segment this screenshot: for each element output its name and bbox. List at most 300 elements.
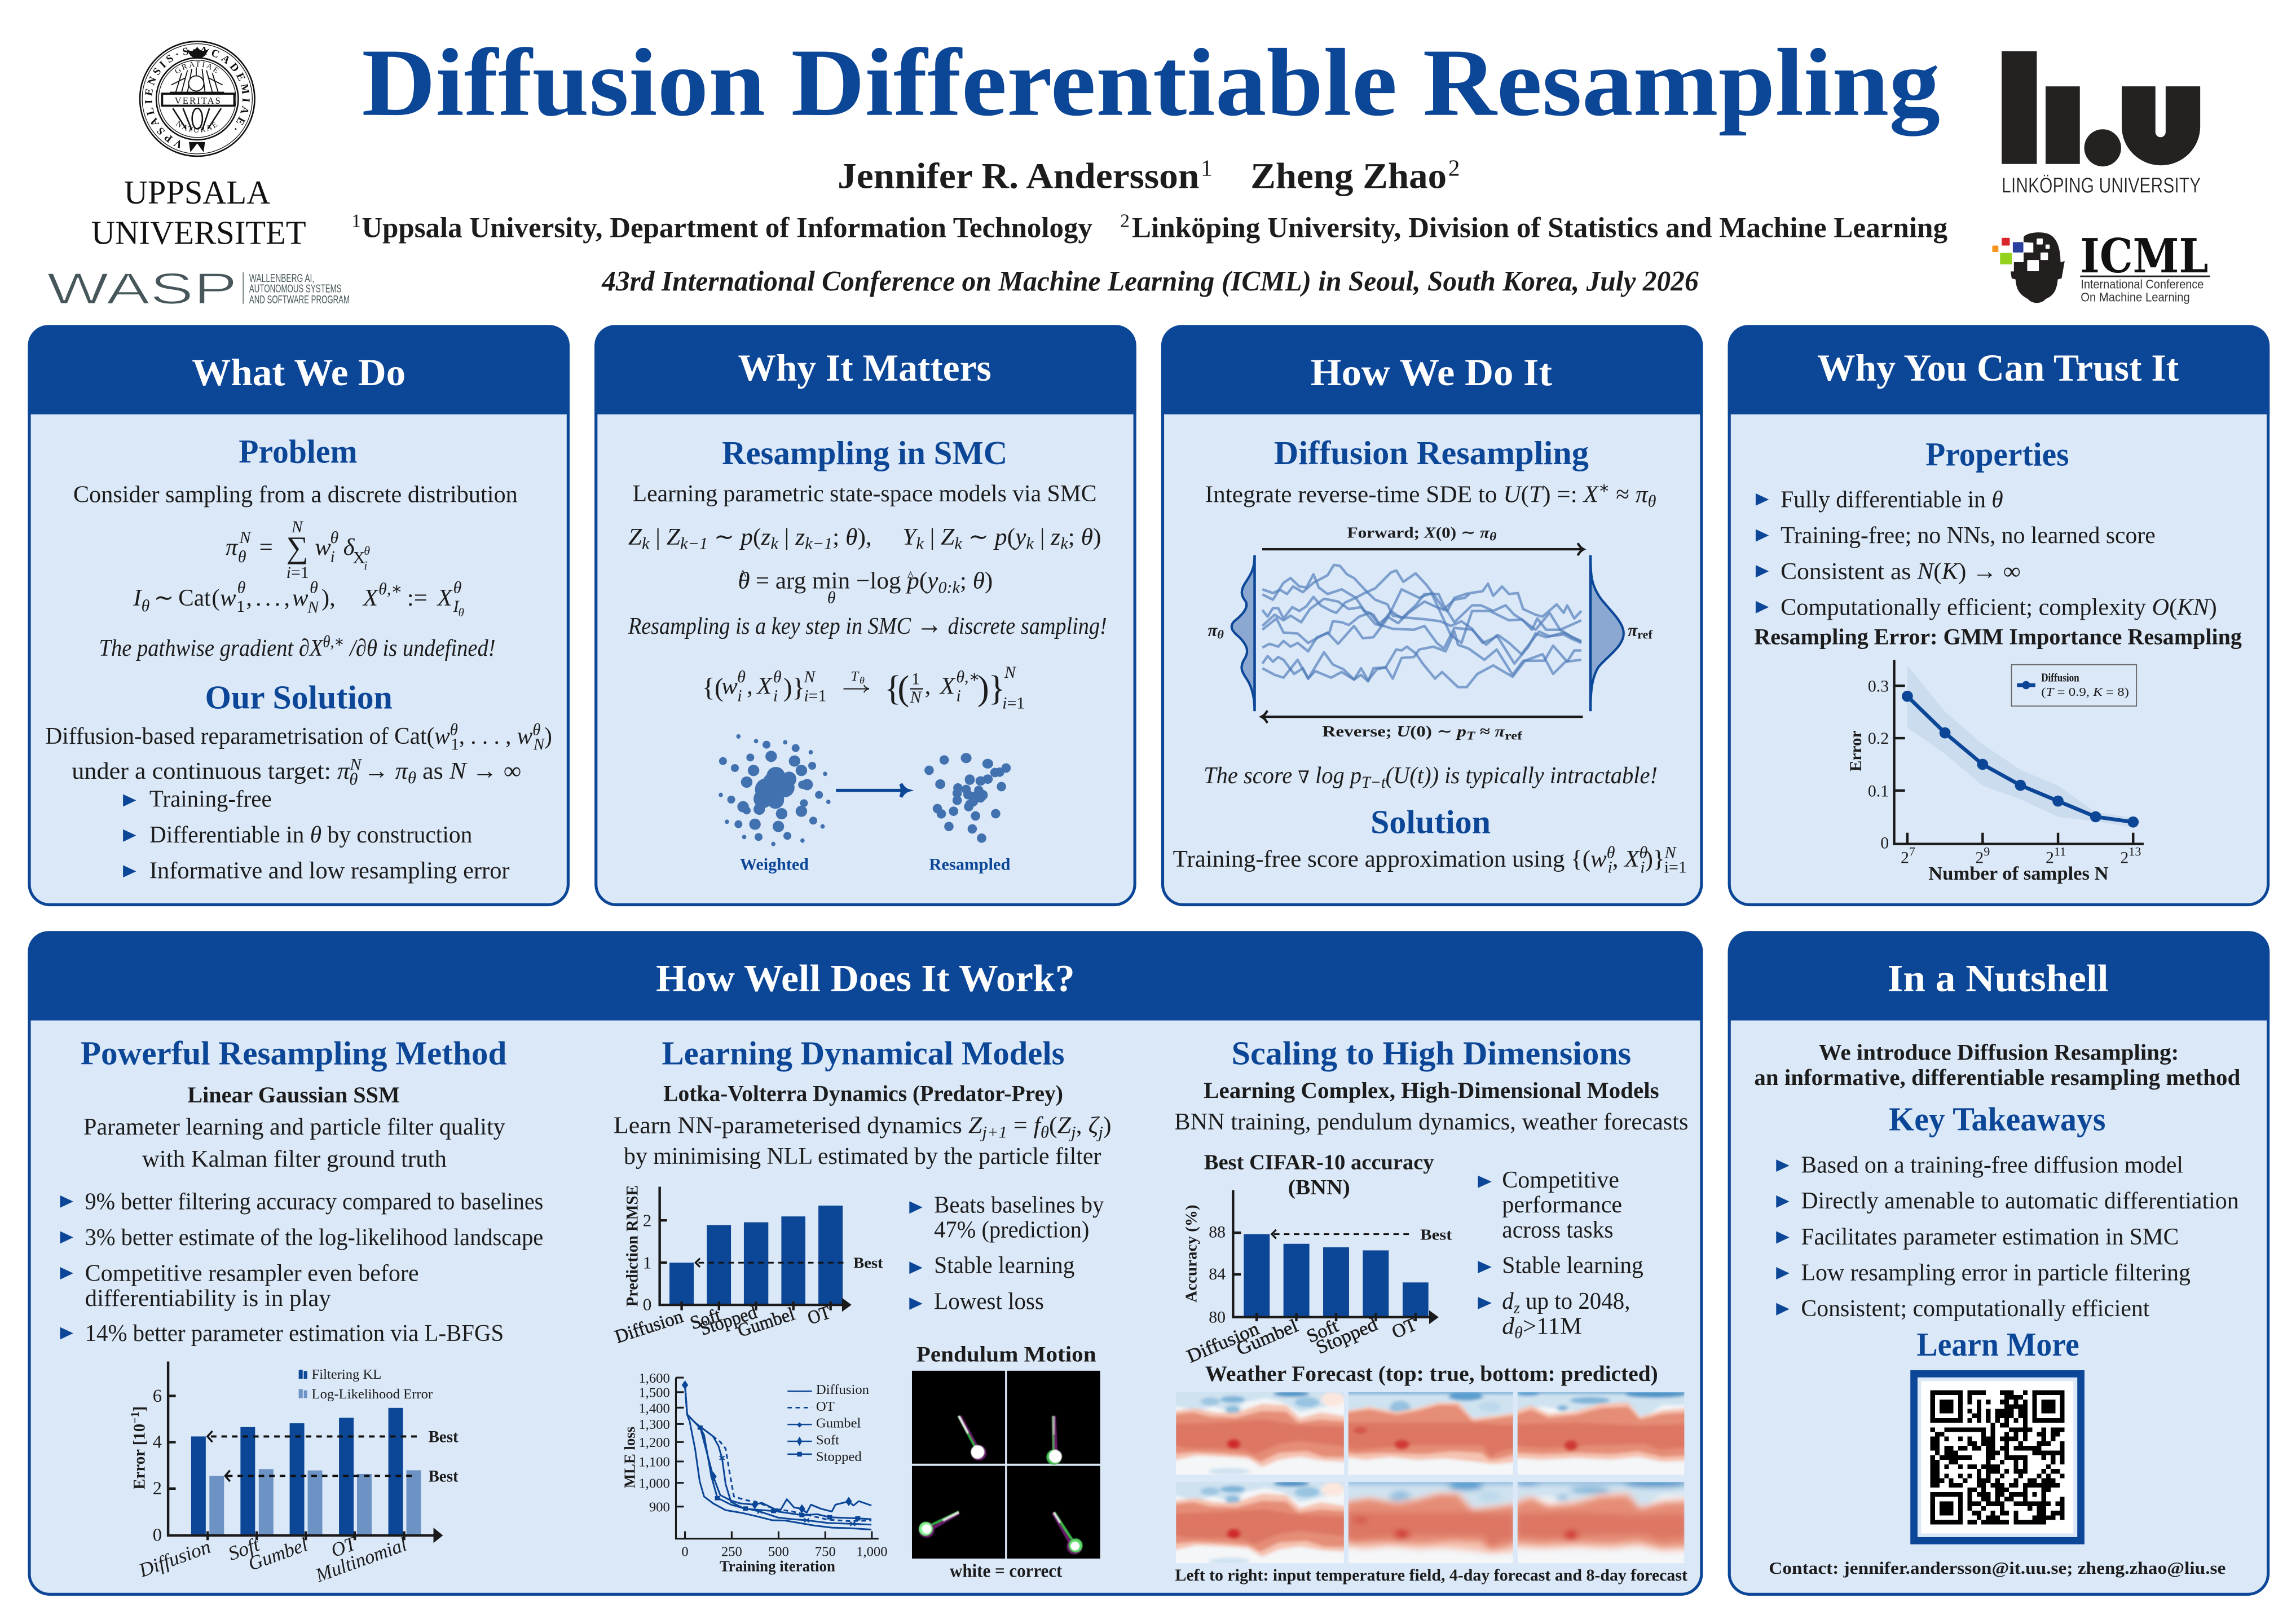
equation: resampling transport: {	[702, 673, 715, 703]
diagram: forward and reverse diffusion	[1208, 524, 1652, 742]
text: method description	[83, 1114, 505, 1172]
y tick labels: 6	[153, 1386, 162, 1406]
text: dynamics description: ζ	[1088, 1112, 1100, 1138]
affiliations: 1	[351, 210, 361, 231]
legend: Gumbel	[816, 1415, 861, 1431]
caption: weather forecast: Left to right: input temperature field, 4-day forecast and 8-day forecast	[1175, 1566, 1687, 1585]
panel body	[29, 933, 1702, 1594]
bullets: scaling results: performance	[1502, 1191, 1622, 1218]
equation: MLE objective: θ	[738, 568, 750, 594]
heatmap: predicted 8-day	[1517, 1482, 1684, 1563]
bullets: dynamics results: 47% (prediction)	[934, 1217, 1089, 1243]
equation: categorical index: X	[437, 585, 453, 611]
arrow: axis head	[434, 1528, 443, 1543]
equation: state-space model: k	[954, 535, 963, 553]
text: dynamics description: j	[1069, 1123, 1076, 1141]
y tick labels	[153, 1386, 162, 1546]
x tick labels: Stopped	[697, 1301, 760, 1340]
text: resampling is key: Resampling is a key step in SMC → discrete sampling!	[628, 608, 1107, 641]
equation: resampling transport: }	[792, 673, 805, 703]
text: solution description: →	[358, 758, 395, 784]
label: best: Best	[428, 1467, 459, 1485]
subheading: Scaling to High Dimensions: Scaling to High Dimensions	[1231, 1034, 1631, 1071]
equation: MLE objective	[738, 567, 993, 607]
subheading: Diffusion Resampling: Diffusion Resampling	[1274, 434, 1589, 471]
text: solution description: as	[416, 758, 449, 784]
text: dynamics description: θ	[1041, 1123, 1049, 1141]
bullets: scaling results: z	[1513, 1299, 1520, 1317]
x tick labels: Gumbel	[245, 1533, 311, 1575]
x tick labels: Stopped	[1313, 1314, 1381, 1358]
equation: empirical distribution: θ	[330, 528, 338, 547]
bullets: solution properties: Training-free	[149, 786, 272, 813]
equation: categorical index: I	[133, 585, 142, 611]
authors: Zheng Zhao	[1250, 156, 1447, 197]
text: training-free score: i	[1640, 858, 1645, 876]
equation: resampling transport: i=1	[804, 687, 826, 705]
text: solution description: θ	[450, 720, 458, 739]
label: pi ref: π	[1628, 620, 1638, 640]
label: pi ref: ref	[1637, 628, 1652, 642]
legend: Stopped	[816, 1449, 862, 1464]
arrowhead: filtering best	[208, 1431, 213, 1442]
text: training-free score: ,	[1612, 846, 1624, 872]
x tick labels: 1,000	[856, 1544, 888, 1560]
density: left target	[1232, 555, 1255, 711]
legend: Filtering KL	[312, 1367, 381, 1382]
text: dynamics description: Z	[1057, 1112, 1072, 1138]
chart: resampling error line	[1847, 660, 2144, 884]
axes	[660, 1187, 848, 1310]
heading: What We Do: What We Do	[192, 351, 406, 394]
x tick labels	[1901, 844, 2141, 867]
text: Linköping University: LINKÖPING UNIVERSITY	[2002, 173, 2201, 197]
heatmap: true input	[1176, 1392, 1344, 1475]
equation: state-space model: k−1	[680, 535, 708, 553]
bullets: dynamics results	[909, 1192, 1104, 1315]
x tick labels: OT	[328, 1532, 360, 1561]
x tick labels: OT	[1389, 1314, 1420, 1343]
text: solution description: π	[395, 758, 408, 784]
text: WASP program name: AUTONOMOUS SYSTEMS	[249, 283, 341, 295]
bullets: dynamics results: Lowest loss	[934, 1288, 1044, 1315]
equation: categorical index: Cat	[178, 585, 210, 611]
equation: resampling transport: X	[756, 673, 773, 700]
text: dynamics description: Learn NN-parameterised dynamics Z	[614, 1112, 982, 1138]
bars: filtering KL	[191, 1408, 403, 1534]
equation: resampling transport: θ	[773, 668, 782, 686]
text: solution description: w	[517, 723, 533, 749]
rule	[2080, 276, 2210, 277]
bullets: key takeaways: Based on a training-free diffusion model	[1801, 1152, 2183, 1179]
text: training-free score: Training-free score approximation using {(w	[1173, 846, 1607, 872]
best line: log-likelihood	[227, 1475, 415, 1476]
curves	[685, 1385, 871, 1530]
text: method description: with Kalman filter ground truth	[142, 1146, 447, 1172]
text: undefined gradient note: /∂θ is undefined!	[345, 635, 496, 661]
equation: state-space model: |	[924, 524, 941, 550]
authors: 2	[1448, 155, 1460, 181]
y tick labels: 2	[643, 1210, 651, 1230]
axes	[1894, 660, 2144, 844]
equation: resampling transport: θ	[860, 674, 865, 686]
subheading: Resampling in SMC: Resampling in SMC	[722, 434, 1007, 471]
equation: state-space model: Z	[667, 524, 681, 550]
equation: MLE objective: θ)	[973, 568, 993, 594]
equation: resampling transport: ,	[925, 673, 931, 700]
label: best: Best	[853, 1254, 883, 1271]
text: solution description: , . . . ,	[459, 723, 517, 749]
x tick labels: Diffusion	[612, 1306, 686, 1348]
axes	[676, 1378, 879, 1539]
bullets: method results: differentiability is in play	[85, 1285, 331, 1312]
x tick labels	[612, 1301, 834, 1348]
QR frame	[1914, 1374, 2081, 1541]
equation: empirical distribution: θ	[238, 548, 246, 566]
legend: Log-Likelihood Error	[312, 1387, 433, 1402]
equation: resampling transport	[702, 663, 1025, 713]
text: scaling tasks: BNN training, pendulum dynamics, weather forecasts	[1174, 1109, 1689, 1135]
icon: Uppsala seal: GRATIAE	[175, 61, 219, 73]
text: reverse-time SDE: ≈	[1610, 482, 1636, 508]
arrowhead: best	[695, 1258, 700, 1267]
QR background	[1921, 1381, 2073, 1533]
text: dynamics description	[614, 1112, 1112, 1170]
bold heading: complex models: Learning Complex, High-Dimensional Models	[1204, 1078, 1659, 1103]
panel: Why You Can Trust It	[1728, 325, 2269, 904]
x axis title: Number of samples N	[1928, 863, 2109, 884]
equation: resampling transport: )	[783, 673, 792, 703]
text: WASP wordmark: WASP	[47, 264, 237, 314]
equation: empirical distribution: w	[315, 534, 331, 561]
y tick labels	[1868, 677, 1889, 853]
text: solution description: N	[533, 735, 545, 753]
y tick labels: 1,500	[638, 1385, 670, 1401]
x tick labels: Soft	[225, 1533, 263, 1565]
icon: Uppsala seal: VERITAS	[175, 95, 222, 106]
equation: categorical index: θ	[453, 578, 461, 597]
bullets: scaling results: >11M	[1523, 1313, 1582, 1339]
equation: state-space model: ∼	[708, 524, 741, 550]
equation: categorical index: w	[292, 585, 309, 611]
equation: empirical distribution: =	[259, 534, 273, 561]
equation: categorical index: ∼	[154, 585, 174, 611]
equation: MLE objective: ^	[739, 567, 746, 583]
text: ICML full name: International Conference	[2081, 277, 2204, 291]
bullets: scaling results: d	[1502, 1288, 1514, 1314]
logo: ICML	[1992, 228, 2210, 304]
logo: WASP	[47, 264, 350, 314]
heading: How Well Does It Work?: How Well Does It Work?	[656, 957, 1075, 1000]
x tick labels: Gumbel	[735, 1304, 797, 1341]
bars: log-likelihood error	[209, 1469, 421, 1534]
x tick labels: 9	[1984, 844, 1990, 858]
equation: state-space model: ;	[832, 524, 845, 550]
chart title: resampling error: Resampling Error: GMM Importance Resampling	[1754, 624, 2242, 649]
x tick labels: 0	[681, 1544, 689, 1560]
text: training-free score: N	[1664, 843, 1677, 862]
x tick labels: 250	[721, 1544, 742, 1560]
y tick labels: 0.1	[1868, 782, 1889, 800]
text: ICML full name	[2081, 277, 2204, 304]
x axis title: Training iteration	[720, 1557, 835, 1574]
text: contact: Contact: jennifer.andersson@it.uu.se; zheng.zhao@liu.se	[1769, 1558, 2226, 1578]
y axis title: Accuracy (%)	[1183, 1204, 1200, 1303]
y tick labels: 1,100	[638, 1455, 670, 1470]
equation: state-space model: k−1	[805, 535, 832, 553]
heading: In a Nutshell: In a Nutshell	[1888, 957, 2109, 1000]
panel body	[1729, 326, 2268, 904]
label: reverse: Reverse; U (0) ∼ p	[1322, 723, 1465, 740]
equation: resampling transport: X	[939, 673, 956, 700]
legend: Soft	[816, 1433, 839, 1448]
legend	[2011, 665, 2136, 706]
bullets: solution properties: Differentiable in θ by construction	[149, 822, 472, 848]
text: ICML full name: On Machine Learning	[2081, 290, 2190, 304]
bold heading: Linear Gaussian SSM: Linear Gaussian SSM	[187, 1082, 400, 1107]
panel: Why It Matters	[594, 325, 1136, 904]
equation: categorical index: θ	[310, 578, 318, 597]
equation: categorical index: X	[362, 585, 379, 611]
frame 2	[1007, 1371, 1100, 1465]
text: dynamics description: =	[1007, 1112, 1034, 1138]
chart: error bars	[129, 1361, 459, 1587]
equation: MLE objective: ;	[960, 568, 973, 594]
chart: MLE loss curves	[621, 1371, 888, 1574]
text: solution description: Diffusion-based reparametrisation of Cat(w	[46, 723, 451, 749]
text: training-free score: )}	[1645, 846, 1665, 872]
text: ICML: ICML	[2080, 228, 2208, 284]
equation: state-space model: θ), Y	[845, 524, 916, 550]
equation: resampling transport: w	[721, 673, 738, 700]
panel body	[1729, 933, 2268, 1594]
y tick labels	[1209, 1223, 1226, 1327]
equation: state-space model: ;	[1068, 524, 1081, 550]
text: solution description: θ	[349, 770, 358, 789]
x tick labels	[135, 1532, 409, 1587]
subheading: Properties: Properties	[1925, 436, 2069, 473]
x tick labels: Diffusion	[1184, 1318, 1262, 1367]
text: training-free score: i=1	[1664, 858, 1687, 876]
equation: MLE objective: 0:k	[938, 578, 960, 597]
equation: empirical distribution: ∑	[287, 530, 308, 564]
title: Diffusion Differentiable Resampling	[362, 29, 1940, 136]
y tick labels: 80	[1209, 1308, 1226, 1327]
equation: resampling transport: (	[715, 673, 724, 703]
heatmap: true 8-day	[1517, 1392, 1684, 1475]
text: solution description: θ	[408, 769, 416, 787]
equation: categorical index: , . . . ,	[246, 585, 290, 611]
text: undefined gradient note: θ,∗	[323, 633, 345, 651]
text: WASP program name: WALLENBERG AI,	[249, 272, 314, 285]
panel: What We Do	[28, 325, 570, 904]
x tick labels	[681, 1544, 888, 1560]
x tick labels: Diffusion	[135, 1535, 214, 1582]
icon: ICML head	[1992, 232, 2065, 303]
divider line	[243, 272, 244, 304]
equation: resampling transport: ,	[747, 673, 753, 700]
images: pendulum frames	[912, 1371, 1100, 1559]
equation: state-space model: z	[1050, 524, 1061, 550]
best line	[1274, 1234, 1412, 1235]
x tick labels: Soft	[688, 1304, 724, 1334]
equation: categorical index: (	[211, 585, 219, 611]
equation: state-space model: |	[778, 524, 795, 550]
equation: resampling transport: N	[1004, 663, 1017, 682]
text: summary statement	[1754, 1040, 2240, 1090]
frame 3	[912, 1466, 1005, 1559]
affiliations	[351, 210, 1947, 244]
text: summary statement: We introduce Diffusion Resampling:	[1819, 1040, 2179, 1065]
bullets: method results: 9% better filtering accuracy compared to baselines	[85, 1188, 543, 1215]
bullets: properties: Training-free; no NNs, no learned score	[1781, 522, 2156, 549]
logo: Uppsala University	[91, 41, 306, 251]
bullets: scaling results	[1478, 1167, 1643, 1342]
heading: Why You Can Trust It: Why You Can Trust It	[1817, 347, 2179, 389]
equation: empirical distribution: N	[239, 528, 252, 547]
bullets: solution properties: Informative and low resampling error	[149, 858, 510, 884]
text: reverse-time SDE: Integrate reverse-time SDE to U(T) =: X	[1205, 482, 1598, 508]
authors: Jennifer R. Andersson	[838, 156, 1199, 197]
equation: categorical index: ),	[321, 585, 336, 611]
equation: resampling transport: i	[773, 687, 778, 705]
bullets: method results: 14% better parameter estimation via L-BFGS	[85, 1320, 504, 1347]
label: reverse: ref	[1505, 730, 1523, 742]
text: intractable score note: The score ∇ log p	[1204, 762, 1362, 789]
equation: categorical index: w	[220, 585, 236, 611]
label: reverse: T	[1466, 730, 1476, 742]
authors	[838, 155, 1460, 197]
y axis title: Error [10	[130, 1422, 148, 1490]
arrowhead: log-likelihood best	[225, 1471, 230, 1481]
caption: white = correct: white = correct	[950, 1561, 1063, 1582]
x tick labels: 2	[2120, 848, 2128, 867]
authors: 1	[1201, 155, 1213, 181]
text: dynamics description: by minimising NLL estimated by the particle filter	[624, 1143, 1101, 1170]
y axis title: MLE loss	[621, 1427, 638, 1488]
text: UPPSALA: UPPSALA	[124, 174, 270, 211]
x tick labels: 2	[2046, 848, 2054, 867]
equation: state-space model: k	[642, 535, 650, 553]
illustration: weighted particles	[719, 734, 831, 846]
text: solution description: )	[544, 723, 552, 749]
x tick labels: Soft	[1303, 1316, 1342, 1347]
icon: Uppsala seal: NATURAE	[175, 121, 218, 133]
text: UNIVERSITET: UNIVERSITET	[91, 214, 306, 251]
x tick labels: 13	[2128, 844, 2141, 858]
bullets: key takeaways: Low resampling error in particle filtering	[1801, 1259, 2191, 1286]
equation: state-space model: ∼	[962, 524, 995, 550]
equation: resampling transport: (	[898, 669, 909, 708]
arrow: axis head	[1429, 1310, 1439, 1324]
label: reverse: π	[1495, 723, 1506, 740]
y tick labels: 88	[1209, 1223, 1226, 1242]
text: solution description: N → ∞	[449, 758, 519, 784]
y tick labels: 84	[1209, 1265, 1226, 1283]
y tick labels: 1,300	[638, 1417, 670, 1432]
legend: Diffusion	[2041, 672, 2079, 684]
label: pi theta: θ	[1217, 628, 1224, 642]
equation: state-space model: Z	[941, 524, 955, 550]
column: Powerful Resampling Method	[60, 1034, 543, 1587]
bullets: properties: Fully differentiable in θ	[1781, 487, 2003, 513]
equation: empirical distribution: N	[291, 518, 304, 536]
y tick labels: 0.2	[1868, 729, 1889, 748]
bullets: scaling results: across tasks	[1502, 1217, 1614, 1243]
text: dynamics description: (	[1049, 1112, 1057, 1138]
label: forward: θ	[1489, 531, 1497, 544]
text: solution description: 1	[451, 735, 459, 753]
panel: How Well Does It Work?	[28, 931, 1703, 1594]
text: dynamics description: )	[1103, 1112, 1112, 1138]
bullets: properties: Computationally efficient; complexity O(KN)	[1781, 594, 2217, 620]
y tick labels: 1,000	[638, 1476, 670, 1491]
affiliations: Linköping University, Division of Statistics and Machine Learning	[1132, 212, 1947, 244]
equation: resampling transport: N	[910, 688, 923, 707]
heading: How We Do It: How We Do It	[1311, 351, 1553, 394]
bullets: method results	[60, 1188, 543, 1347]
subheading: Powerful Resampling Method: Powerful Resampling Method	[81, 1034, 506, 1071]
text: SMC intro: Learning parametric state-space models via SMC	[633, 480, 1097, 507]
text: training-free score: X	[1623, 846, 1640, 872]
band: uncertainty	[1907, 665, 2133, 827]
best line: filtering	[211, 1436, 419, 1437]
equation: MLE objective: θ	[827, 589, 836, 607]
text: dynamics description: j	[1096, 1123, 1103, 1141]
legend: (T = 0.9, K = 8)	[2041, 686, 2129, 699]
subheading: Solution: Solution	[1370, 803, 1491, 840]
text: undefined gradient note: The pathwise gradient ∂X	[99, 635, 348, 661]
text: WASP program name	[249, 272, 350, 306]
text: WASP program name: AND SOFTWARE PROGRAM	[249, 293, 350, 306]
y tick labels	[643, 1210, 651, 1314]
equation: resampling transport: i	[737, 687, 742, 705]
bullets: properties	[1756, 487, 2217, 620]
text: reverse-time SDE: θ	[1648, 492, 1656, 510]
panel: In a Nutshell	[1728, 931, 2269, 1594]
bold heading: Lotka-Volterra: Lotka-Volterra Dynamics (Predator-Prey)	[663, 1080, 1063, 1106]
x tick labels: Gumbel	[1233, 1316, 1301, 1360]
y tick labels	[638, 1371, 670, 1515]
x tick labels: OT	[805, 1302, 834, 1329]
equation: categorical index: 1	[236, 597, 245, 616]
equation: MLE objective: ^	[907, 568, 914, 585]
icon: LiU mark	[2002, 51, 2200, 166]
QR code	[1914, 1374, 2081, 1541]
bullets: scaling results: Competitive	[1502, 1167, 1619, 1193]
chart: sample paths	[1262, 565, 1581, 687]
equation: state-space model: p(y	[995, 524, 1026, 550]
text: intractable score note: T−t	[1361, 773, 1386, 792]
label: pi theta: π	[1208, 620, 1217, 640]
y tick labels: 0.3	[1868, 677, 1889, 696]
equation: state-space model: Z	[628, 524, 642, 550]
equation: resampling transport: }	[989, 669, 1005, 708]
label: reverse: ≈	[1475, 723, 1495, 740]
panel header	[1728, 325, 2269, 414]
text: summary statement: an informative, differentiable resampling method	[1754, 1065, 2240, 1090]
column: Scaling to High Dimensions	[1173, 1034, 1689, 1585]
equation: categorical index: θ	[459, 607, 464, 619]
bullets: method results: Competitive resampler even before	[85, 1260, 419, 1287]
equation: MLE objective: = arg min −log p(y	[756, 568, 938, 594]
chart title: CIFAR-10: (BNN)	[1288, 1176, 1350, 1199]
equation: state-space model: k	[1026, 535, 1034, 553]
text: intractable score note: (U(t)) is typically intractable!	[1386, 762, 1658, 789]
text: dynamics description: ,	[1076, 1112, 1088, 1138]
bullets: scaling results: Stable learning	[1502, 1252, 1643, 1278]
y axis title: −1	[129, 1411, 142, 1424]
